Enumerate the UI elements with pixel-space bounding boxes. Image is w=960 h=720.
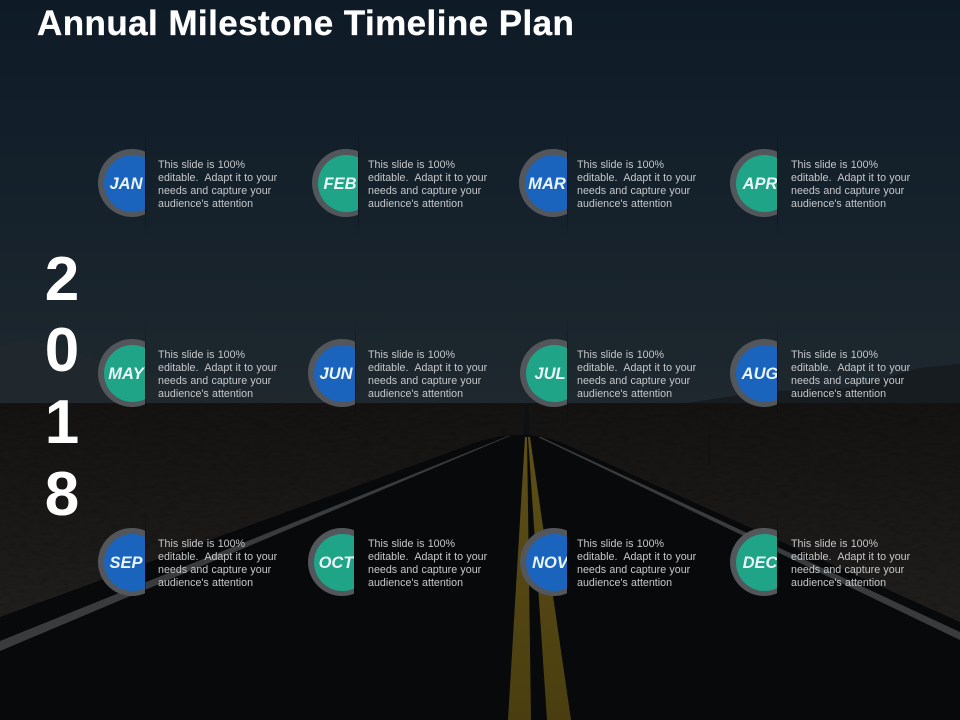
milestone: October: needs and capture your (368, 564, 481, 576)
milestone: December: DEC (743, 554, 777, 572)
milestone: July (520, 336, 696, 407)
year 2018 (45, 245, 79, 529)
milestone: June: needs and capture your (368, 375, 481, 387)
milestone: August: audience's attention (791, 388, 886, 400)
milestone: February: FEB (324, 175, 356, 193)
milestone: July: needs and capture your (577, 375, 690, 387)
milestone: October: This slide is 100% (368, 538, 455, 550)
milestone: January (98, 148, 277, 221)
milestone: January: This slide is 100% (158, 159, 245, 171)
year 2018: 8 (45, 460, 79, 529)
milestone: April: needs and capture your (791, 185, 904, 197)
milestone: November: NOV (532, 554, 567, 572)
milestone: November: needs and capture your (577, 564, 690, 576)
milestone: September: needs and capture your (158, 564, 271, 576)
milestone: April (730, 148, 910, 221)
milestone: March: audience's attention (577, 198, 672, 210)
milestone: August: This slide is 100% (791, 349, 878, 361)
milestone: January: editable. Adapt it to your (158, 172, 277, 184)
year 2018: 0 (45, 316, 79, 385)
milestone: May: This slide is 100% (158, 349, 245, 361)
milestone: March: MAR (528, 175, 566, 193)
milestone: June: JUN (319, 365, 352, 383)
milestone: December: This slide is 100% (791, 538, 878, 550)
milestone: November: This slide is 100% (577, 538, 664, 550)
milestone: January: JAN (109, 175, 142, 193)
milestone: January: needs and capture your (158, 185, 271, 197)
milestone: August: editable. Adapt it to your (791, 362, 910, 374)
title: Annual Milestone Timeline Plan (37, 4, 574, 43)
milestone: June: editable. Adapt it to your (368, 362, 487, 374)
milestone: February: audience's attention (368, 198, 463, 210)
milestone: February: needs and capture your (368, 185, 481, 197)
milestone: September: SEP (109, 554, 143, 572)
milestone: September: editable. Adapt it to your (158, 551, 277, 563)
milestone: February (312, 148, 487, 221)
milestone: May: editable. Adapt it to your (158, 362, 277, 374)
milestone: April: audience's attention (791, 198, 886, 210)
milestone: September: audience's attention (158, 577, 253, 589)
milestone: March (519, 148, 696, 221)
milestone: February: This slide is 100% (368, 159, 455, 171)
milestone: October: editable. Adapt it to your (368, 551, 487, 563)
milestone: August (730, 336, 910, 407)
milestone: May (98, 336, 277, 407)
milestone: November (520, 528, 696, 596)
milestone: September (98, 528, 277, 596)
milestone: October: audience's attention (368, 577, 463, 589)
milestone: June: This slide is 100% (368, 349, 455, 361)
milestone: July: This slide is 100% (577, 349, 664, 361)
milestone: May: needs and capture your (158, 375, 271, 387)
year 2018: 2 (45, 245, 79, 314)
milestone: October: OCT (319, 554, 353, 572)
milestone: March: This slide is 100% (577, 159, 664, 171)
milestone: December (730, 528, 910, 596)
milestone: November: audience's attention (577, 577, 672, 589)
milestone: May: MAY (108, 365, 144, 383)
milestone: March: needs and capture your (577, 185, 690, 197)
milestone: April: This slide is 100% (791, 159, 878, 171)
milestone: December: audience's attention (791, 577, 886, 589)
year 2018: 1 (45, 388, 79, 457)
milestone: October (308, 528, 487, 596)
milestone: December: editable. Adapt it to your (791, 551, 910, 563)
milestone: September: This slide is 100% (158, 538, 245, 550)
milestone: May: audience's attention (158, 388, 253, 400)
milestone: June (308, 336, 487, 407)
milestone: April: APR (743, 175, 777, 193)
milestone: February: editable. Adapt it to your (368, 172, 487, 184)
milestone: November: editable. Adapt it to your (577, 551, 696, 563)
milestone: July: JUL (534, 365, 566, 383)
milestone: August: needs and capture your (791, 375, 904, 387)
milestone: June: audience's attention (368, 388, 463, 400)
milestone: April: editable. Adapt it to your (791, 172, 910, 184)
milestone: July: audience's attention (577, 388, 672, 400)
milestone: December: needs and capture your (791, 564, 904, 576)
milestone: July: editable. Adapt it to your (577, 362, 696, 374)
milestone: January: audience's attention (158, 198, 253, 210)
milestone: March: editable. Adapt it to your (577, 172, 696, 184)
